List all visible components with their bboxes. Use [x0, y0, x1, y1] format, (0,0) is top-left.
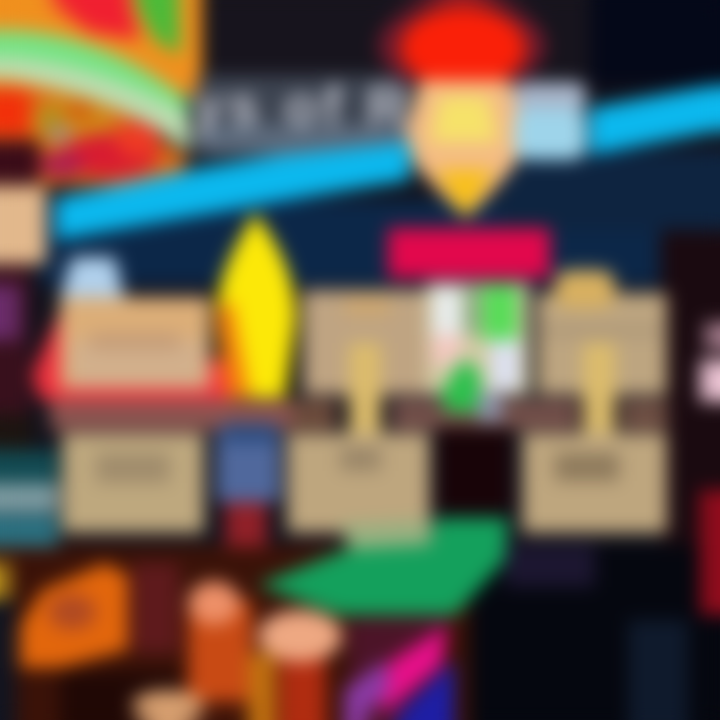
white and green stripes: [427, 283, 529, 422]
panel: bottom left card: [62, 433, 204, 533]
panel: top right card: [537, 270, 667, 395]
panel: top left card: [60, 297, 210, 389]
red glow around top left panel: [32, 310, 232, 402]
red circle and flame icon: [378, 0, 586, 218]
dark column: [438, 427, 510, 513]
left figure edge: [0, 186, 58, 600]
panel: top middle card: [303, 290, 429, 437]
colourful hat at top left: [0, 0, 202, 185]
title banner: ys of R: [192, 74, 407, 137]
orange box bottom centre: [132, 581, 342, 720]
light blue tab above panel: [60, 257, 124, 297]
magenta bar: [388, 228, 550, 278]
green trapezoid: [258, 518, 508, 615]
blue diagonal ribbon: [56, 84, 720, 240]
right edge accents: [700, 322, 720, 615]
blue column: [216, 423, 280, 547]
panel: bottom right card: [522, 433, 667, 533]
brown divider strip: [50, 343, 668, 437]
magenta and blue stripe: [344, 617, 454, 720]
orange box bottom left: [20, 563, 128, 668]
panel: bottom middle card: [287, 433, 430, 533]
yellow tall shape: [216, 213, 296, 398]
